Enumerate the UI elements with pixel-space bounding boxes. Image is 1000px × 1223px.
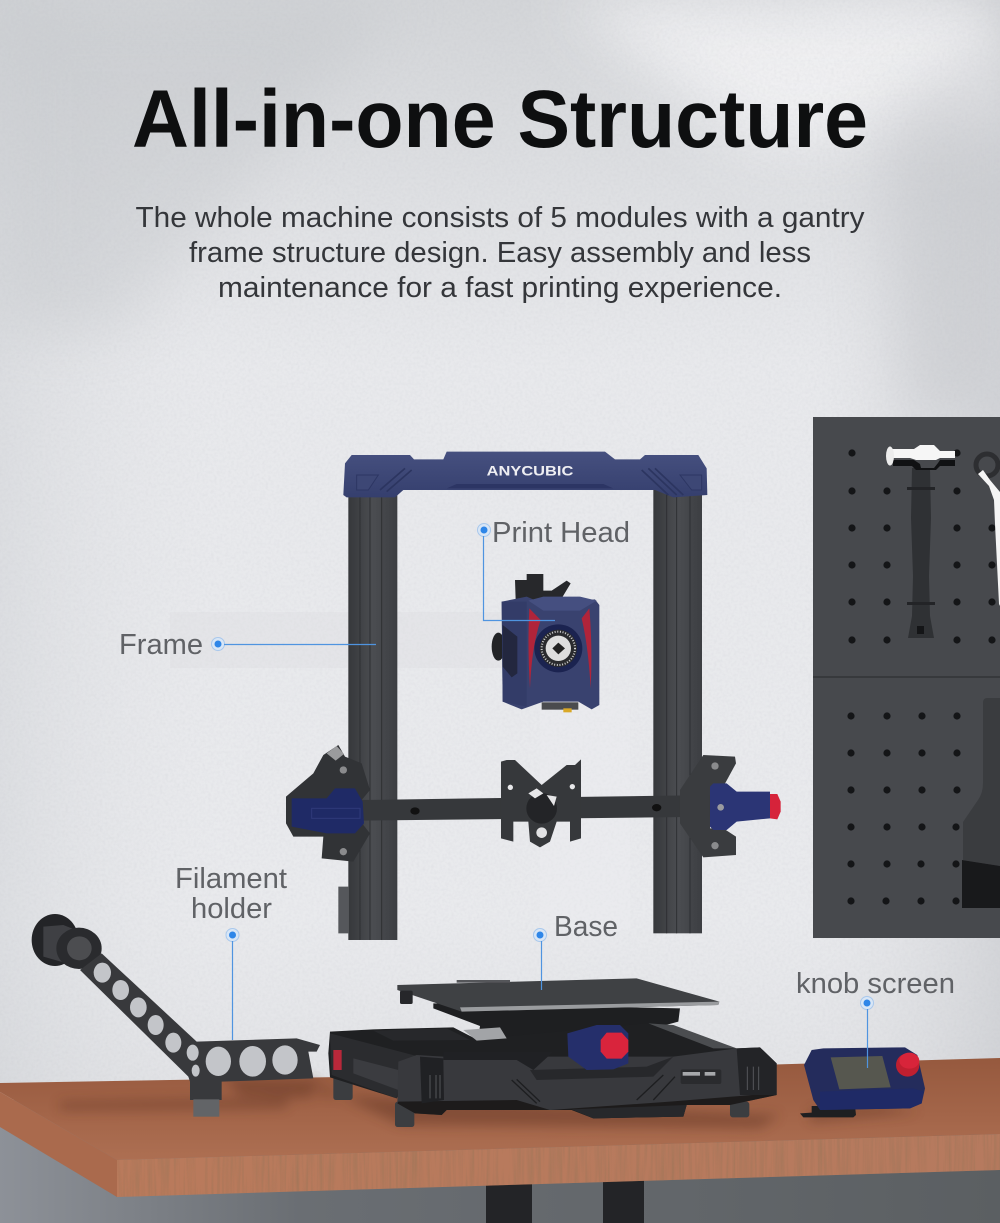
right carriage xyxy=(680,755,781,857)
table left edge xyxy=(0,1092,117,1197)
table xyxy=(0,1058,1000,1223)
left carriage xyxy=(286,745,370,862)
icon: brush xyxy=(962,698,1000,908)
frame top bar xyxy=(343,452,707,497)
filament holder xyxy=(32,914,320,1117)
frame right column xyxy=(653,490,702,933)
callout: Print Head xyxy=(478,517,630,620)
callout: Filament holder xyxy=(175,863,287,1040)
table top surface xyxy=(0,1058,1000,1160)
description text: The whole machine consists of 5 modules with a gantry xyxy=(136,202,865,234)
pegboard holes xyxy=(847,449,996,905)
description text: maintenance for a fast printing experience. xyxy=(218,272,782,304)
frame xyxy=(338,452,707,940)
callout: Base xyxy=(534,911,618,990)
base control slots xyxy=(681,1069,721,1084)
print head xyxy=(492,574,599,712)
red switch xyxy=(333,1050,342,1070)
knob screen module xyxy=(800,1047,925,1117)
description text xyxy=(136,202,865,304)
printer base xyxy=(328,978,777,1127)
Y-axis knob cover xyxy=(567,1025,628,1070)
red knob xyxy=(770,794,781,819)
table front face xyxy=(117,1134,1000,1197)
gantry crossbar xyxy=(286,745,781,862)
crossbar beam xyxy=(360,795,717,821)
callout: Filament holder: holder xyxy=(191,893,272,925)
callout: Base: Base xyxy=(554,911,618,943)
base end pieces xyxy=(420,1057,444,1103)
frame small bracket xyxy=(338,887,348,933)
centre carriage plate xyxy=(501,759,581,847)
base body xyxy=(397,1047,777,1118)
base rails xyxy=(328,1023,737,1098)
brand logo: ANYCUBIC xyxy=(487,462,573,478)
holder foot xyxy=(193,1099,219,1117)
object shadows on table xyxy=(60,1078,920,1128)
print bed plate xyxy=(397,978,719,1012)
icon: hammer xyxy=(886,445,955,638)
pegboard xyxy=(813,417,1000,938)
title: All-in-one Structure xyxy=(132,74,868,165)
area under table xyxy=(0,1100,1000,1223)
description text: frame structure design. Easy assembly and less xyxy=(189,237,811,269)
callout: knob screen: knob screen xyxy=(796,968,955,1000)
bed mechanism xyxy=(433,1003,680,1050)
callout: Frame: Frame xyxy=(119,629,203,661)
frame left column xyxy=(348,495,397,940)
callout: Filament holder: Filament xyxy=(175,863,287,895)
table legs xyxy=(486,1175,644,1223)
callout: knob screen xyxy=(796,968,955,1068)
base feet xyxy=(333,1077,749,1127)
callout: Frame xyxy=(119,629,376,661)
callout: Print Head: Print Head xyxy=(492,517,630,549)
icon: scissors xyxy=(976,454,1000,606)
